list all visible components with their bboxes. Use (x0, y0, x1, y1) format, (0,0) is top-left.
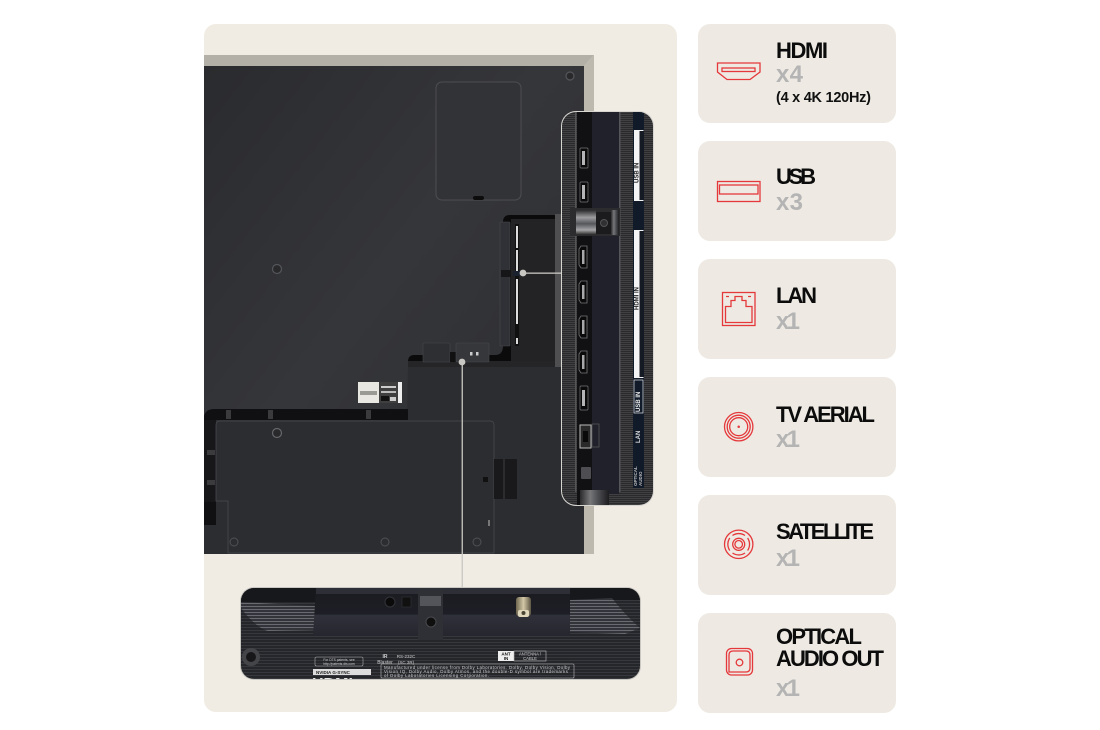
satellite count: x1 (776, 545, 800, 572)
icon: USB port (718, 182, 760, 202)
audio out heading: AUDIO OUT (776, 646, 885, 671)
centre clip (418, 594, 443, 639)
base print text: of Dolby Laboratories Licensing Corporation. (384, 673, 489, 678)
LAN heading: LAN (776, 283, 817, 308)
port labels (633, 130, 644, 486)
base print text: ANTENNA / (519, 652, 542, 656)
base print text: HDMI (312, 676, 353, 693)
callout leader lines (459, 270, 562, 588)
mounting screws (272, 72, 574, 546)
lower cover (216, 421, 494, 553)
HDMI heading: HDMI (776, 38, 828, 63)
icon: HDMI port (718, 63, 760, 80)
base print text: ANT (501, 652, 511, 656)
base print text: (SC 3R) (398, 660, 415, 665)
upper port recess (408, 214, 561, 367)
port labels: OPTICAL (633, 466, 638, 486)
panel: side ports close-up (561, 111, 654, 506)
base print text: RS-232C (397, 654, 416, 659)
cable channel left (204, 409, 408, 525)
card: satellite (698, 495, 896, 595)
lower body panel (204, 367, 584, 554)
base print text (313, 650, 574, 679)
base print text: Manufactured under license from Dolby Laboratories. Dolby, Dolby Vision, Dolby (384, 665, 571, 670)
TV rear details (204, 72, 584, 554)
icon: LAN port (722, 292, 755, 326)
HDMI count: x4 (776, 61, 804, 88)
base print text: Vision IQ, Dolby Audio, Dolby Atmos, and the double-D symbol are trademarks (384, 669, 569, 674)
satellite heading: SATELLITE (776, 519, 874, 544)
optical socket (402, 597, 411, 607)
TV rear body (204, 66, 584, 554)
icon: optical socket (726, 648, 752, 675)
rating label (358, 382, 402, 403)
base print text: IN (504, 656, 508, 661)
USB ports (580, 148, 588, 410)
optical port (581, 467, 591, 479)
TV frame edge (204, 55, 594, 554)
LAN port (580, 424, 599, 448)
left screw boss (242, 648, 260, 666)
card: USB (698, 141, 896, 241)
USB heading: USB (776, 164, 816, 189)
access cover (436, 82, 521, 200)
base print text: Blaster (377, 660, 393, 666)
card: LAN (698, 259, 896, 359)
optical heading: OPTICAL (776, 624, 862, 649)
bottom connector blocks (423, 343, 489, 362)
card: TV aerial (698, 377, 896, 477)
right bulge (570, 598, 640, 634)
HDMI note: (4 x 4K 120Hz) (776, 90, 871, 106)
optical count: x1 (776, 675, 800, 702)
port labels: USB IN (635, 163, 641, 183)
port labels: USB IN (636, 392, 642, 412)
card: optical audio out (698, 613, 896, 713)
bottom connector (580, 490, 609, 506)
port labels: AUDIO (638, 471, 643, 486)
HDMI ports (579, 246, 587, 373)
base print text: IR (382, 654, 388, 660)
port labels: LAN (636, 431, 642, 443)
TV aerial heading: TV AERIAL (776, 402, 875, 427)
cable clip band (570, 208, 620, 236)
base print text: http://patents.dts.com (323, 662, 355, 666)
base print text: CABLE (523, 656, 537, 661)
panel: TV rear view background (204, 24, 677, 712)
icon: coaxial socket (724, 412, 753, 441)
IR jack (385, 597, 395, 607)
TV aerial count: x1 (776, 426, 800, 453)
base print text: For DTS patents, see (323, 658, 355, 662)
USB count: x3 (776, 189, 803, 216)
base print text: NVIDIA G-SYNC (316, 670, 351, 675)
card: HDMI (698, 24, 896, 123)
infographic (204, 24, 896, 713)
panel: bottom ports close-up (240, 587, 641, 680)
recessed port shelf (313, 594, 570, 634)
left bulge (241, 602, 316, 631)
side tab (494, 459, 517, 499)
antenna connector (516, 597, 531, 617)
LAN count: x1 (776, 308, 800, 335)
port labels: HDMI IN (635, 287, 641, 310)
icon: satellite socket (724, 530, 753, 558)
